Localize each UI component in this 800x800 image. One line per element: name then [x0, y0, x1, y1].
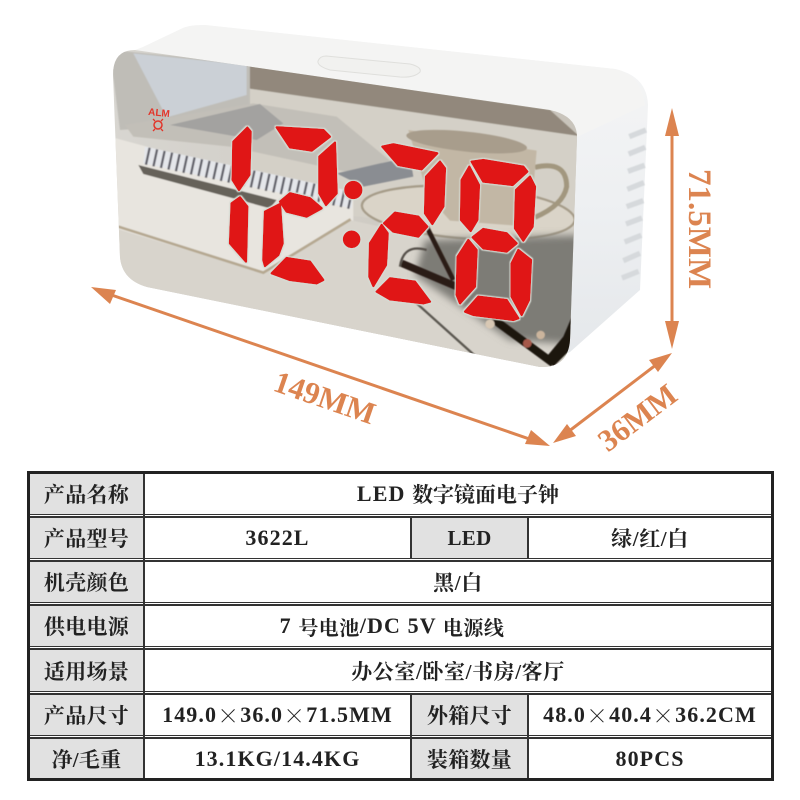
- LED time display 12:28: [230, 127, 535, 320]
- side vents: [622, 130, 646, 278]
- label: 149MM: 149MM: [269, 364, 380, 431]
- carton quantity label: 装箱数量: [427, 748, 512, 772]
- label: 36MM: 36MM: [591, 376, 684, 458]
- clock body: [113, 25, 648, 367]
- row: shell colour: [30, 562, 143, 602]
- power button pill: [318, 56, 420, 77]
- weight value: 13.1KG/14.4KG: [195, 746, 360, 770]
- product size value: ×: [283, 700, 306, 730]
- mirror photo face: [113, 50, 577, 367]
- carton quantity label: [412, 739, 527, 778]
- carton quantity value: 80PCS: [615, 746, 685, 770]
- carton size label: 外箱尺寸: [427, 704, 512, 728]
- carton size value: 48.0 40.4 36.2CM: [543, 702, 757, 727]
- row: weight label: [30, 739, 143, 778]
- LED label: [412, 518, 527, 558]
- row: power supply: [30, 606, 143, 646]
- LED colours value: 绿/红/白: [611, 527, 689, 551]
- row: model label: 产品型号: [44, 527, 129, 551]
- carton size value: ×: [586, 700, 609, 730]
- alarm indicator: [148, 107, 170, 131]
- specification table: LED: [357, 481, 405, 506]
- row: usage scenes: 适用场景: [44, 660, 129, 684]
- specification table: 黑/白: [433, 571, 483, 595]
- row: model label: [30, 518, 143, 558]
- product size value: ×: [217, 700, 240, 730]
- digit 1 and 2 with colon: [230, 127, 361, 283]
- specification table: 电源线: [443, 618, 504, 640]
- LED label: LED: [447, 526, 492, 550]
- row: shell colour: 机壳颜色: [44, 571, 129, 595]
- row: product name: [30, 474, 143, 514]
- arrow: width 149MM: [91, 287, 550, 446]
- row: product size label: [30, 695, 143, 735]
- specification table: 数字镜面电子钟: [412, 483, 559, 507]
- alarm indicator: ALM: [148, 107, 170, 120]
- carton size value: ×: [652, 700, 675, 730]
- specification table: 7 /DC 5V: [280, 613, 436, 638]
- row: weight label: 净/毛重: [51, 748, 122, 772]
- digit 2 and 8: [369, 144, 535, 320]
- clock product illustration with dimension arrows: [91, 25, 710, 452]
- product size value: 149.0 36.0 71.5MM: [162, 702, 393, 727]
- specification table: 办公室/卧室/书房/客厅: [351, 660, 565, 684]
- carton size label: [412, 695, 527, 735]
- label: 71.5MM: 71.5MM: [681, 169, 717, 289]
- row: product size label: 产品尺寸: [44, 704, 129, 728]
- model value: 3622L: [245, 525, 310, 550]
- specification table: [27, 471, 774, 781]
- arrow: height 71.5MM: [665, 108, 679, 349]
- row: usage scenes: [30, 650, 143, 691]
- arrow: depth 36MM: [553, 353, 672, 443]
- specification table: 号电池: [298, 618, 360, 640]
- row: product name: 产品名称: [44, 483, 129, 507]
- row: power supply: 供电电源: [44, 615, 129, 639]
